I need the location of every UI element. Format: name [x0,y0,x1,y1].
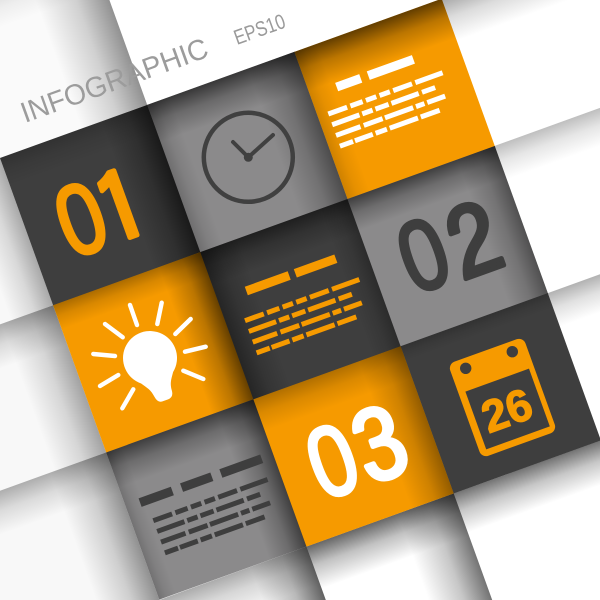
body bars [244,277,372,355]
number 01 [41,152,161,280]
icon: calendar [448,337,557,458]
text block: grey tile [139,455,281,557]
calendar ring right [507,346,518,357]
number 02 [383,187,514,316]
panel: orange tile bulb [53,252,254,453]
heading bars [335,55,415,91]
panel: orange tile text [294,0,495,200]
heading bars [139,455,263,507]
panel: grey tile clock [147,52,348,253]
body bars [152,477,280,555]
text block: orange tile [319,47,455,149]
number 01: 1 [82,152,161,261]
calendar date: 26 [475,378,539,443]
number 02: 0 [383,195,464,316]
icon: light bulb [93,303,206,409]
number 02: 2 [435,187,514,296]
bulb rays [93,303,206,408]
panel: grey tile 02 [348,146,548,347]
number 03: 3 [341,391,420,500]
number 03: 0 [292,401,373,522]
title: INFOGRAPHIC: INFOGRAPHIC [17,33,213,130]
heading bars [245,254,337,295]
label: EPS10: EPS10 [231,10,289,50]
panel: dark tile calendar [401,293,600,493]
icon: clock [204,113,293,202]
text block: dark tile [234,249,372,355]
number 03 [292,391,420,522]
panel: dark tile 01 [0,105,201,306]
bulb body [115,323,191,409]
calendar body [448,337,557,458]
calendar window [465,369,550,449]
number 01: 0 [41,160,122,280]
calendar ring left [460,363,471,374]
panel: dark tile text [200,199,401,400]
body bars [327,70,455,149]
panel: grey tile text [106,399,307,600]
panel: orange tile 03 [253,346,454,547]
